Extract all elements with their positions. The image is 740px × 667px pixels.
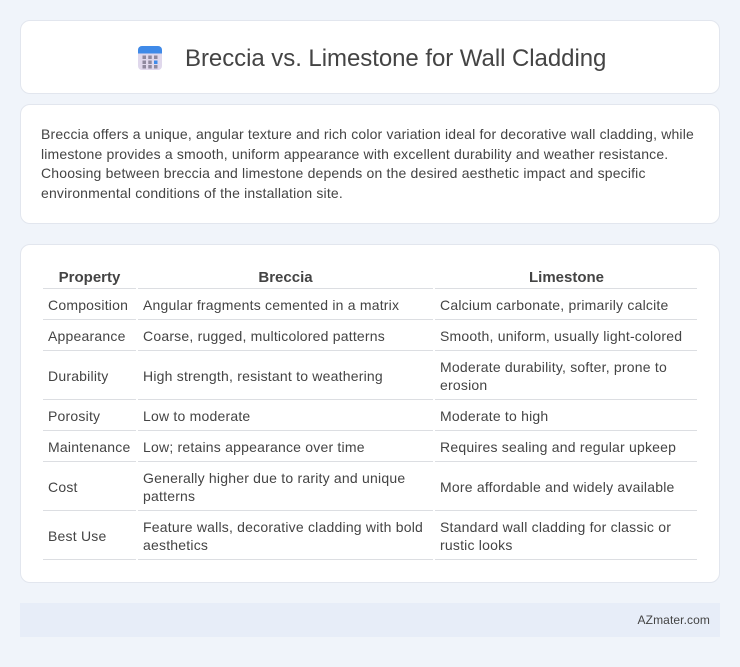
row: appearance: Smooth, uniform, usually light-colored (440, 328, 682, 344)
intro paragraph: environmental conditions of the installation site. (41, 184, 343, 200)
title: Breccia vs. Limestone for Wall Cladding (185, 45, 606, 72)
row: cost: Generally higher due to rarity and unique (143, 470, 405, 486)
row: composition: Angular fragments cemented in a matrix (143, 297, 399, 313)
intro paragraph: Choosing between breccia and limestone depends on the desired aesthetic impact and specific (41, 165, 646, 181)
row: maintenance: Requires sealing and regular upkeep (440, 439, 676, 455)
row: best use: rustic looks (440, 537, 513, 553)
row: maintenance (48, 439, 676, 455)
row: best use: aesthetics (143, 537, 208, 553)
row: durability: High strength, resistant to weathering (143, 368, 383, 384)
intro paragraph: limestone provides a smooth, uniform appearance with excellent durability and weather resistance. (41, 146, 668, 162)
row: porosity: Low to moderate (143, 408, 250, 424)
row: cost: More affordable and widely available (440, 479, 675, 495)
icon: calendar (138, 46, 162, 70)
panel: intro text (20, 104, 720, 224)
row: best use: Standard wall cladding for classic or (440, 519, 671, 535)
row: porosity: Porosity (48, 408, 100, 424)
row: durability: Durability (48, 368, 108, 384)
row: durability: erosion (440, 377, 487, 393)
row: durability (48, 359, 667, 393)
row: composition: Calcium carbonate, primarily calcite (440, 297, 669, 313)
panel: title card (20, 20, 720, 94)
table header (59, 269, 604, 286)
row: appearance (48, 328, 682, 344)
row: appearance: Coarse, rugged, multicolored patterns (143, 328, 385, 344)
row: maintenance: Maintenance (48, 439, 130, 455)
intro paragraph: Breccia offers a unique, angular texture and rich color variation ideal for decorative wall cladding, while (41, 126, 694, 142)
row: appearance: Appearance (48, 328, 126, 344)
row: durability: Moderate durability, softer, prone to (440, 359, 667, 375)
row: composition (48, 297, 669, 313)
table header: Property (59, 269, 120, 286)
row: composition: Composition (48, 297, 128, 313)
row: best use: Feature walls, decorative cladding with bold (143, 519, 423, 535)
row: best use (48, 519, 671, 553)
panel: comparison table (20, 244, 720, 583)
footer credit: AZmater.com (638, 613, 710, 627)
footer bar (20, 603, 720, 637)
row: cost (48, 470, 675, 504)
row: best use: Best Use (48, 528, 106, 544)
table header: Limestone (529, 269, 604, 286)
intro paragraph (41, 126, 694, 200)
table header: Breccia (258, 269, 313, 286)
row: cost: patterns (143, 488, 195, 504)
row: cost: Cost (48, 479, 78, 495)
row: porosity: Moderate to high (440, 408, 548, 424)
row: porosity (48, 408, 548, 424)
row: maintenance: Low; retains appearance over time (143, 439, 365, 455)
